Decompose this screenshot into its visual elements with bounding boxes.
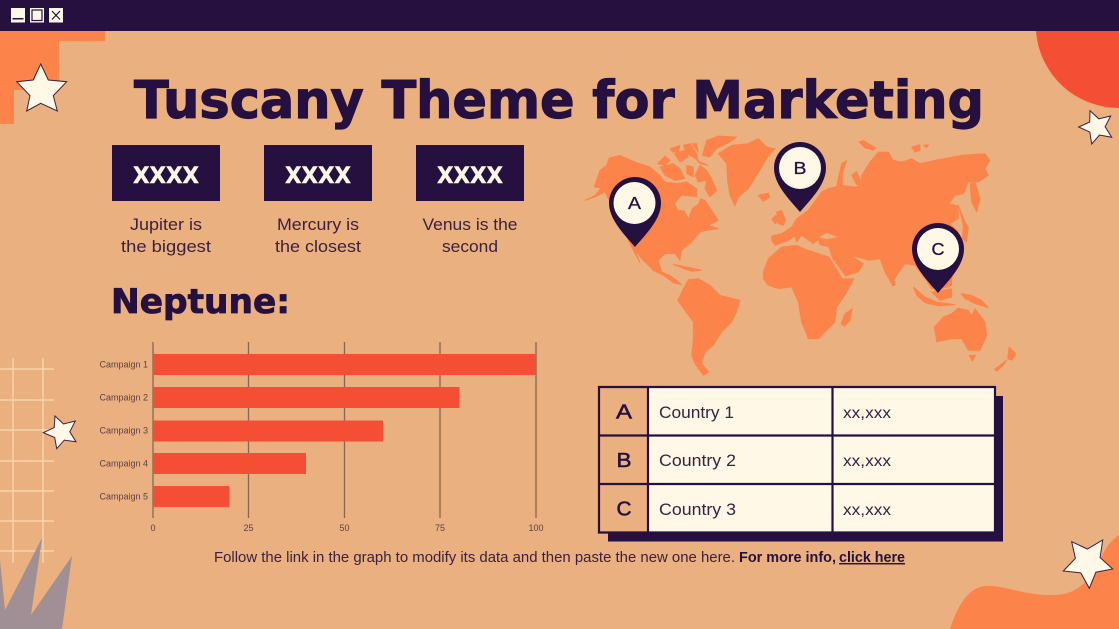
country table: C	[616, 498, 632, 520]
top-right red circle	[1036, 31, 1119, 108]
stat card: Jupiter: the biggest	[121, 237, 211, 256]
country table: Country 2	[659, 451, 736, 470]
country table: A	[616, 402, 633, 424]
country table: xx,xxx	[843, 453, 891, 470]
stat card: Mercury: Mercury is	[277, 215, 359, 234]
stat card: Jupiter: XXXX	[133, 164, 199, 189]
country table: xx,xxx	[843, 502, 891, 519]
bar chart: 25	[243, 523, 254, 533]
country table: B	[616, 450, 632, 472]
country table: Country 1	[659, 403, 734, 422]
stat card: Venus: Venus is the	[422, 215, 518, 234]
map pin B: B	[794, 158, 806, 178]
bar chart: 0	[150, 523, 156, 533]
star bottom right	[1063, 540, 1113, 588]
decorative grid	[0, 358, 54, 563]
footer note: Follow the link in the graph to modify its data and then paste the new one here.	[214, 550, 735, 566]
country table: Country 3	[659, 500, 736, 519]
bar chart: 50	[339, 523, 350, 533]
map pin C: C	[932, 239, 944, 259]
heading: Neptune: Neptune:	[111, 282, 290, 322]
top-left orange corner shape	[0, 31, 105, 124]
stat card: Mercury: XXXX	[285, 164, 351, 189]
bar chart: Campaign 4	[99, 458, 148, 468]
footer note: For more info,	[739, 550, 836, 566]
title: Tuscany Theme for Marketing	[134, 71, 984, 131]
bottom-right orange blob	[950, 535, 1119, 629]
bar chart: Campaign 2	[99, 392, 148, 402]
bar chart: Campaign 3	[99, 426, 148, 436]
bar chart: 100	[528, 523, 544, 533]
map pin C	[912, 223, 964, 293]
stat card: Jupiter: Jupiter is	[130, 215, 202, 234]
bar chart	[99, 342, 544, 533]
stat card: Mercury	[264, 145, 372, 256]
bar chart: 75	[435, 523, 445, 533]
window title bar	[0, 0, 1119, 31]
star top left	[17, 64, 67, 111]
star top right	[1079, 111, 1112, 144]
map pin B	[774, 142, 826, 212]
world map	[585, 136, 1016, 375]
country table: xx,xxx	[843, 405, 891, 422]
country table	[599, 387, 1003, 542]
stat card: Mercury: the closest	[275, 237, 361, 256]
map pin A: A	[628, 193, 641, 213]
bar chart: Campaign 5	[99, 492, 148, 502]
star middle left	[43, 416, 76, 449]
footer note: click here	[839, 550, 905, 566]
stat card: Venus	[416, 145, 524, 256]
stat card: Venus: second	[442, 237, 498, 256]
stat card: Venus: XXXX	[437, 164, 503, 189]
grey spikes	[0, 538, 72, 629]
bar chart: Campaign 1	[99, 360, 148, 370]
map pin A	[609, 177, 661, 247]
stat card: Jupiter	[112, 145, 220, 256]
